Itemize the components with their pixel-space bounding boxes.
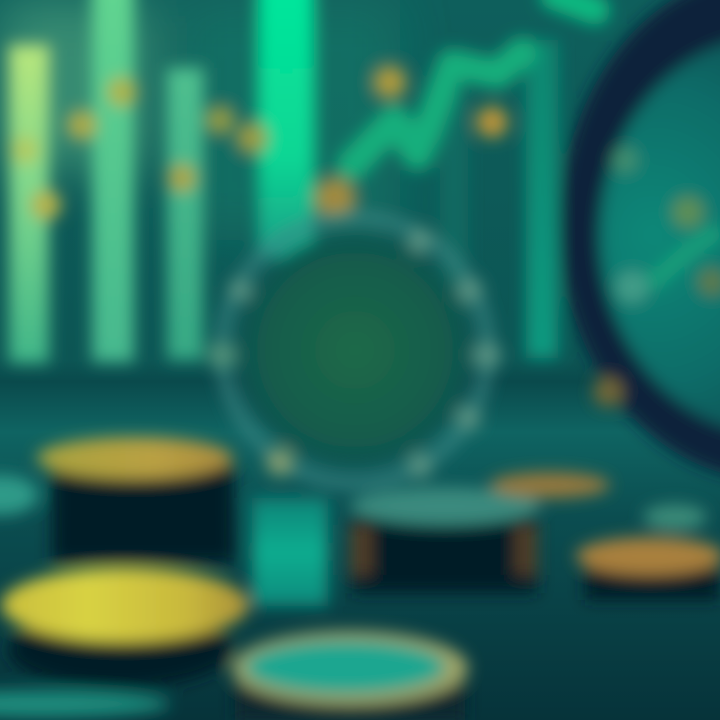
coin stack: top left: [37, 437, 234, 563]
coin: teal with tan rim: [232, 631, 468, 720]
foreground: bottom left teal sweep: [0, 690, 170, 718]
coin stack: center right: [350, 487, 540, 593]
coin: far left edge: [0, 475, 38, 515]
globe: dark ring with teal interior: [560, 0, 720, 480]
coin: bright yellow: [1, 568, 249, 688]
magnifier ring: [222, 217, 488, 483]
data points: orange markers: [11, 66, 508, 220]
glow: top-left wash: [0, 0, 400, 240]
bar chart: vertical glowing bars: [9, 0, 558, 363]
magnifier beads: [208, 227, 501, 478]
coin: tan small: [490, 472, 610, 498]
marker on globe ring: [593, 377, 623, 407]
magnifier lens: [239, 234, 471, 466]
magnifier handle: [252, 498, 328, 606]
coin stack: right orange: [576, 504, 720, 600]
line chart: green zigzag trend: [352, 0, 595, 165]
magnifying glass: [208, 217, 501, 606]
